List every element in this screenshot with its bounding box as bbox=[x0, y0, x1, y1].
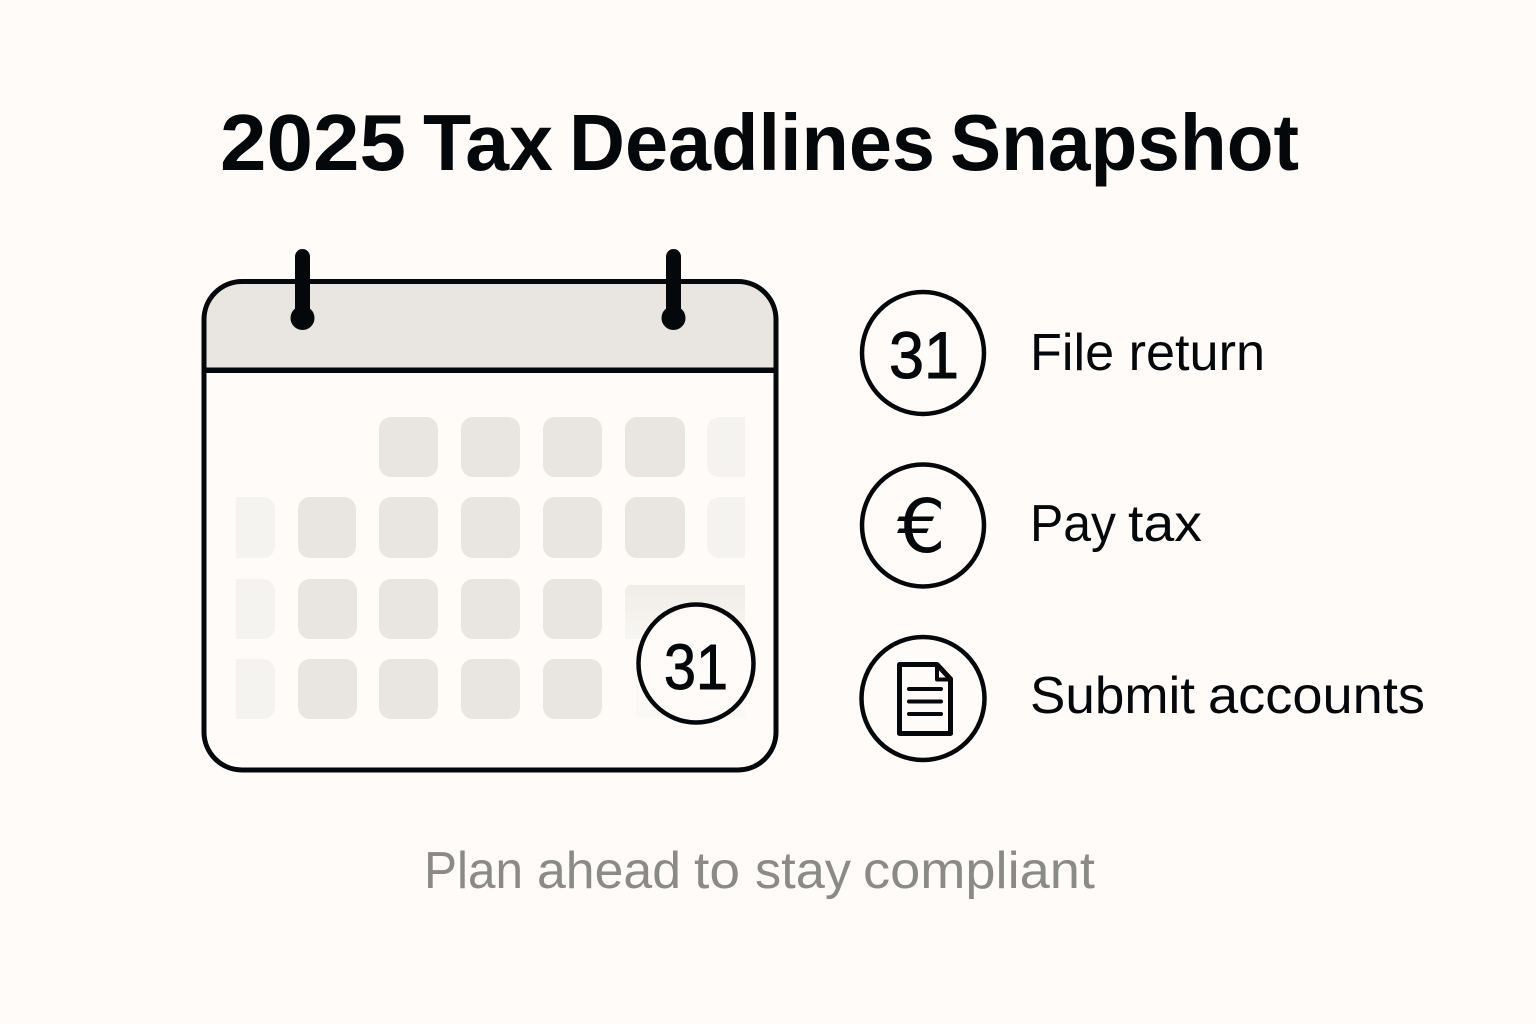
deadline badge 31: 31 bbox=[664, 631, 728, 703]
footer tagline: to bbox=[694, 842, 740, 900]
header divider bbox=[204, 368, 776, 373]
title: Deadlines bbox=[569, 98, 935, 187]
label: pay tax bbox=[1030, 495, 1202, 553]
label: submit accounts bbox=[1030, 667, 1425, 725]
label: file return: File return bbox=[1030, 324, 1265, 382]
label: pay tax: Pay bbox=[1030, 495, 1116, 553]
binder ring left bbox=[290, 249, 314, 330]
calendar illustration bbox=[204, 249, 776, 770]
calendar outline bbox=[204, 282, 776, 770]
footer tagline: ahead bbox=[537, 842, 681, 900]
calendar header band bbox=[204, 281, 776, 370]
icon: euro: € bbox=[897, 484, 946, 570]
footer tagline: stay bbox=[755, 842, 851, 900]
icon: euro bbox=[862, 464, 984, 586]
icon: date 31 bbox=[862, 292, 984, 414]
title: Tax bbox=[423, 98, 553, 187]
title bbox=[220, 98, 1299, 187]
label: submit accounts: accounts bbox=[1208, 667, 1425, 725]
deadline badge 31 bbox=[638, 604, 754, 722]
item: submit accounts bbox=[862, 637, 1425, 760]
label: pay tax: tax bbox=[1128, 495, 1202, 553]
footer tagline: compliant bbox=[863, 842, 1096, 900]
label: submit accounts: Submit bbox=[1030, 667, 1196, 725]
item: pay tax bbox=[862, 464, 1202, 586]
footer tagline bbox=[424, 842, 1096, 900]
footer tagline: Plan bbox=[424, 842, 523, 900]
title: 2025 bbox=[220, 98, 406, 187]
item: file return bbox=[862, 292, 1265, 414]
icon: date 31: 31 bbox=[889, 318, 959, 392]
calendar day grid bbox=[236, 417, 745, 719]
binder ring right bbox=[662, 249, 686, 330]
icon: document bbox=[862, 637, 984, 760]
title: Snapshot bbox=[950, 98, 1299, 187]
